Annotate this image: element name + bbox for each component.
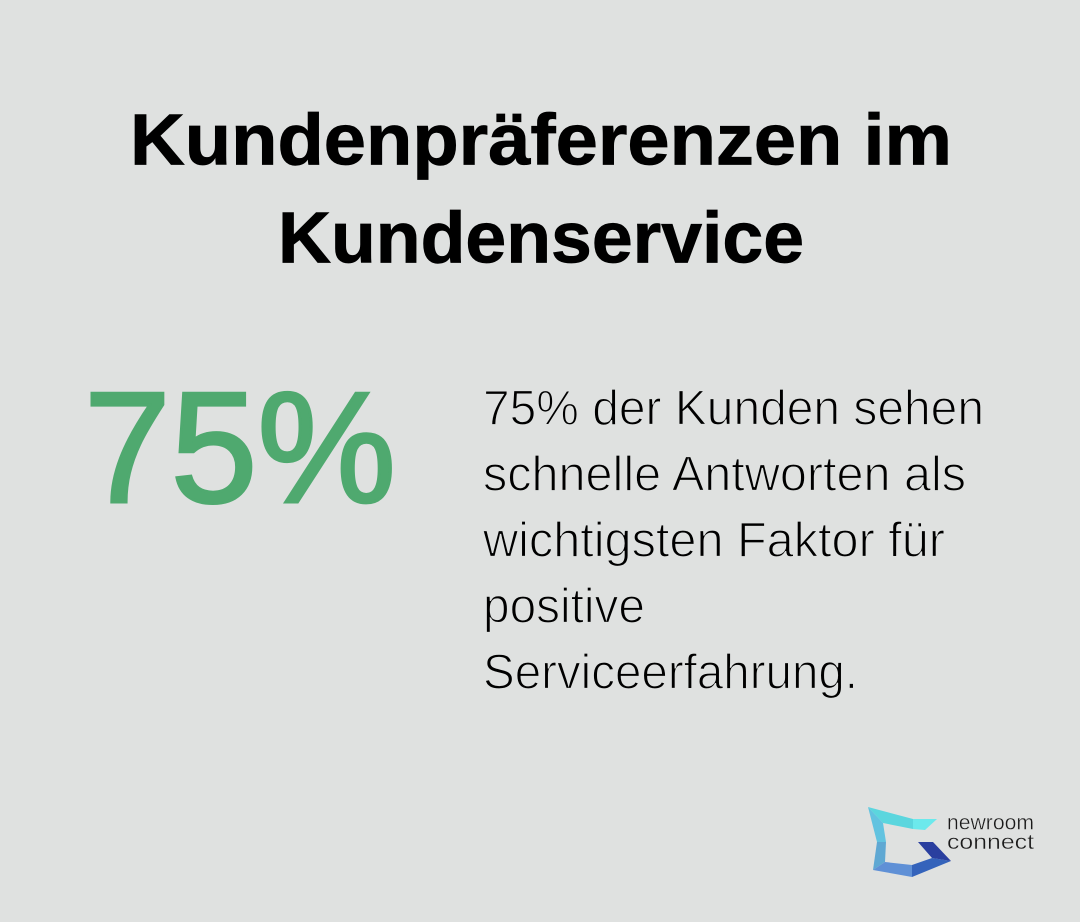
big statistic: 75%: 75% bbox=[84, 360, 396, 536]
description text: positive bbox=[483, 580, 645, 634]
description text bbox=[482, 382, 984, 700]
description text: schnelle Antworten als bbox=[483, 448, 966, 502]
logo: newroom connect bbox=[868, 807, 1034, 877]
title bbox=[130, 100, 952, 278]
title: Kundenpräferenzen im bbox=[130, 100, 952, 180]
description text: Serviceerfahrung. bbox=[483, 646, 858, 700]
description text: 75% der Kunden sehen bbox=[483, 382, 984, 436]
icon: logo mark bbox=[868, 807, 951, 877]
logo wordmark bbox=[947, 812, 1034, 854]
description text: wichtigsten Faktor für bbox=[482, 514, 945, 568]
logo wordmark: newroom bbox=[947, 812, 1034, 834]
title: Kundenservice bbox=[278, 198, 804, 278]
logo wordmark: connect bbox=[947, 831, 1034, 854]
